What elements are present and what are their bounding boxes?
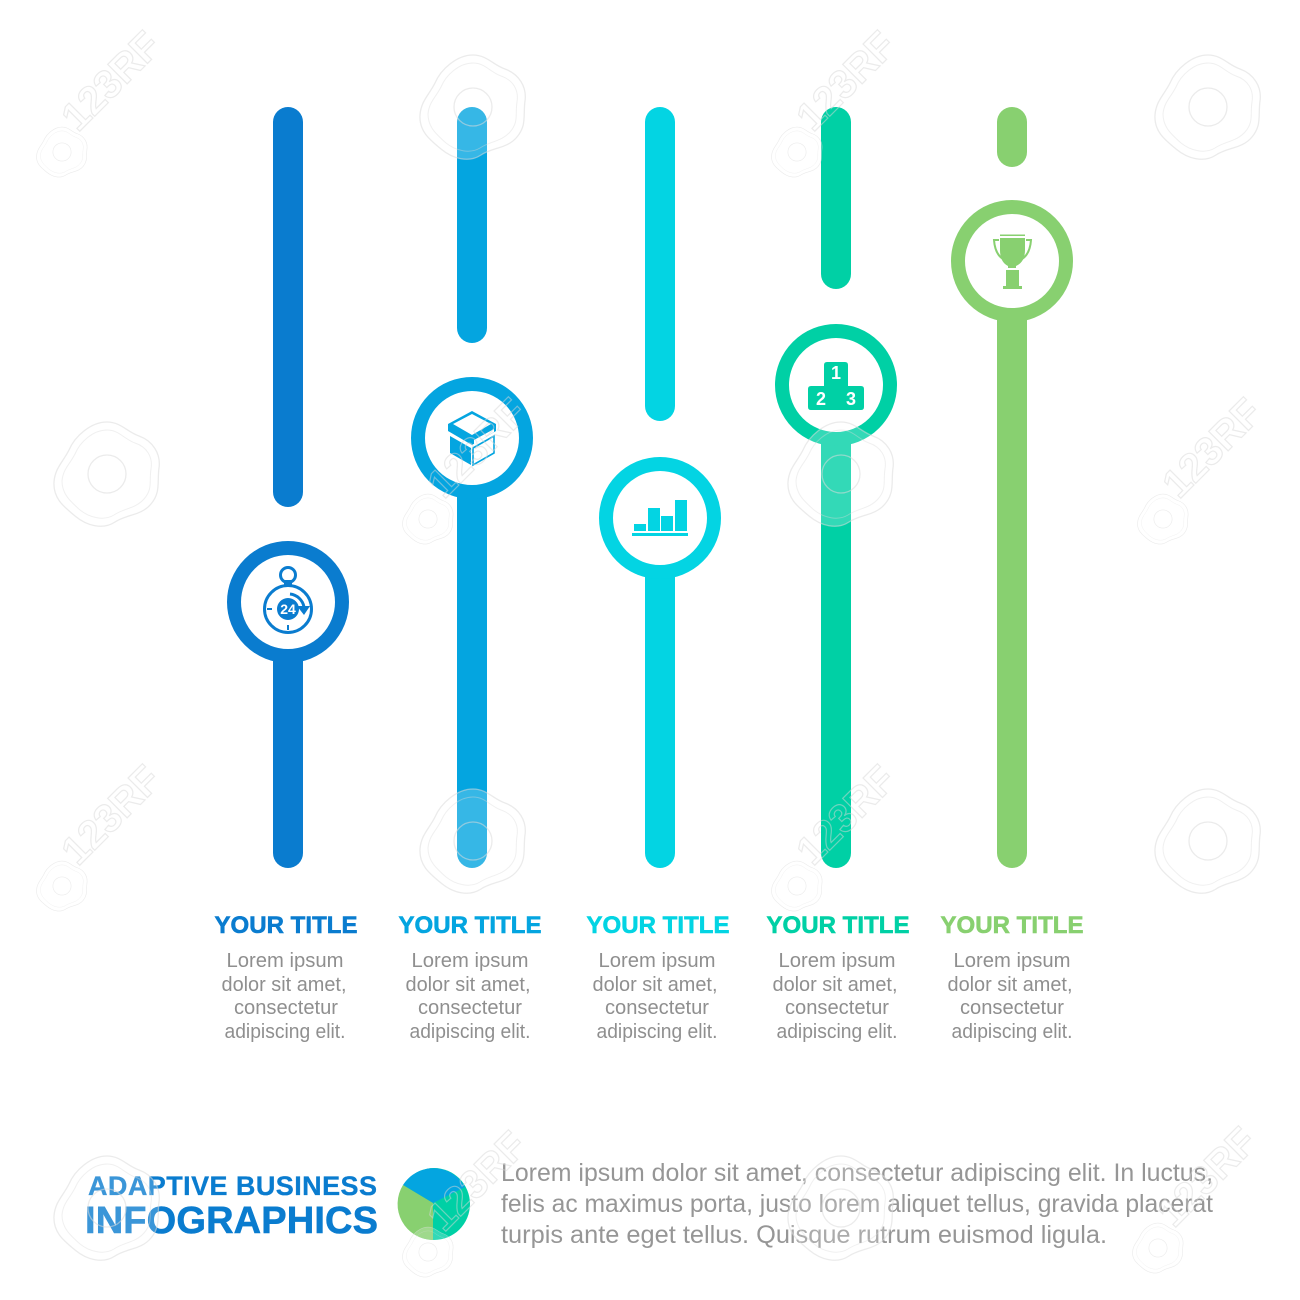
column 3 body <box>592 950 718 1043</box>
slider ring 1 <box>234 548 342 656</box>
column 2 title: YOUR TITLE <box>398 912 542 939</box>
slider column 1 <box>234 107 342 868</box>
column 4 body <box>772 950 898 1043</box>
column 4 body: adipiscing elit. <box>776 1021 898 1043</box>
column 4 body: consectetur <box>785 997 889 1019</box>
column 5 body: consectetur <box>960 997 1064 1019</box>
slider column 3 <box>606 107 714 868</box>
icon: podium <box>808 362 864 410</box>
column 1 text <box>214 912 358 1043</box>
column 4 body: Lorem ipsum <box>778 950 896 972</box>
icon: podium: 2 <box>816 389 826 409</box>
slider track 3 <box>645 107 675 868</box>
column 1 body: Lorem ipsum <box>226 950 344 972</box>
slider ring 4 <box>782 331 890 439</box>
footer heading <box>85 1171 378 1242</box>
column 3 title: YOUR TITLE <box>586 912 730 939</box>
column 2 body: Lorem ipsum <box>412 950 528 972</box>
slider track 4 <box>821 107 851 868</box>
footer paragraph <box>501 1159 1213 1249</box>
footer heading: ADAPTIVE BUSINESS <box>88 1171 377 1201</box>
column 5 title: YOUR TITLE <box>940 912 1084 939</box>
column 1 body <box>222 950 346 1043</box>
column 2 body: consectetur <box>418 997 522 1019</box>
column 1 body: dolor sit amet, <box>222 974 346 996</box>
footer heading: INFOGRAPHICS <box>85 1200 378 1242</box>
slider column 5 <box>958 107 1066 868</box>
column 3 body: dolor sit amet, <box>592 974 718 996</box>
slider column 2 <box>418 107 526 868</box>
watermarks: 123RF <box>788 23 904 139</box>
icon: podium: 3 <box>846 389 856 409</box>
slider column 4 <box>782 107 890 868</box>
slider ring 3 <box>606 464 714 572</box>
watermarks: 123RF <box>419 1123 535 1239</box>
icon: bar chart <box>632 500 688 536</box>
footer pie icon <box>398 1168 470 1240</box>
column 4 text <box>766 912 910 1043</box>
slider ring 2 <box>418 384 526 492</box>
column 3 body: consectetur <box>605 997 709 1019</box>
column 1 title: YOUR TITLE <box>214 912 358 939</box>
watermarks: 123RF <box>788 757 904 873</box>
column 5 text <box>940 912 1084 1043</box>
slider track 1 <box>273 107 303 868</box>
icon: stopwatch 24 <box>264 568 312 632</box>
icon: podium: 1 <box>831 363 841 383</box>
column 5 body: adipiscing elit. <box>952 1021 1072 1043</box>
footer paragraph: Lorem ipsum dolor sit amet, consectetur adipiscing elit. In luctus, <box>501 1159 1213 1187</box>
watermarks: 123RF <box>53 757 169 873</box>
icon: stopwatch 24: 24 <box>280 601 296 617</box>
column 4 body: dolor sit amet, <box>772 974 898 996</box>
watermarks: 123RF <box>53 23 169 139</box>
column 2 body: dolor sit amet, <box>406 974 530 996</box>
watermarks: 123RF <box>419 390 535 506</box>
icon: trophy <box>994 234 1031 289</box>
column 5 body: Lorem ipsum <box>954 950 1070 972</box>
column 3 text <box>586 912 730 1043</box>
column 1 body: adipiscing elit. <box>224 1021 346 1043</box>
icon: box <box>448 411 496 465</box>
column 4 title: YOUR TITLE <box>766 912 910 939</box>
slider track 5 <box>997 107 1027 868</box>
slider track 2 <box>457 107 487 868</box>
column 2 text <box>398 912 542 1043</box>
footer paragraph: turpis ante eget tellus. Quisque rutrum euismod ligula. <box>501 1221 1107 1249</box>
slider ring 5 <box>958 207 1066 315</box>
column 5 body: dolor sit amet, <box>948 974 1072 996</box>
watermarks: 123RF <box>1154 390 1270 506</box>
column 3 body: Lorem ipsum <box>598 950 716 972</box>
column 2 body <box>406 950 530 1043</box>
column 5 body <box>948 950 1072 1043</box>
column 2 body: adipiscing elit. <box>410 1021 530 1043</box>
footer paragraph: felis ac maximus porta, justo lorem aliquet tellus, gravida placerat <box>501 1190 1213 1218</box>
watermarks: 123RF <box>1149 1119 1265 1235</box>
column 1 body: consectetur <box>234 997 338 1019</box>
column 3 body: adipiscing elit. <box>596 1021 718 1043</box>
